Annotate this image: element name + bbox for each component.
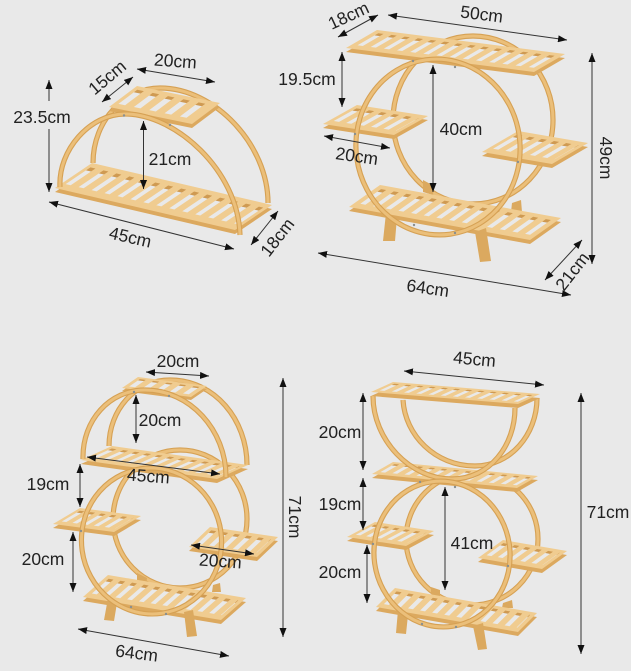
dimension: 20cm upper height: 20cm [139,410,181,430]
dimension: 41cm [445,487,493,590]
screws [372,481,509,628]
bottom shelf [349,185,561,244]
dimension: 20cm [137,50,215,82]
right shelf [478,540,567,573]
dimension: 20cm left shelf: 20cm [334,143,379,169]
dimension: 20cm right shelf [191,545,254,572]
dimension: 45cm: 45cm [107,223,153,252]
top shelf [109,86,220,128]
front legs [104,598,197,637]
figure: arch over ring stand [22,351,305,666]
dimension: 64cm: 64cm [114,641,159,666]
dimension: 19cm: 19cm [27,474,69,494]
dimension: 19.5cm: 19.5cm [278,69,336,89]
dimension: 19cm: 19cm [319,494,361,514]
bottom shelf [55,163,272,234]
right shelf [189,527,278,561]
front legs [383,213,491,262]
bottom shelf [83,575,246,624]
dimension: 64cm [318,253,571,301]
dimension: 19.5cm [278,52,342,107]
dimension: 41cm: 41cm [451,533,493,553]
upper front arch [83,390,226,477]
dimension: 64cm [78,629,229,666]
dimension: 23.5cm [13,80,71,192]
dimension: 21cm: 21cm [551,248,593,294]
lower front ring [72,459,231,623]
dimension: 45cm [87,457,220,487]
left shelf [53,508,141,536]
dimension: 18cm: 18cm [256,214,298,260]
screws [80,391,170,615]
dimension: 20cm lower [319,545,367,603]
dimension: 20cm: 20cm [153,50,197,72]
bottom shelf [376,588,537,636]
figure: bowl over ring stand [319,347,629,654]
lower front ring [365,472,519,636]
dimension: 19cm [27,464,80,507]
dimension: 40cm [433,65,482,192]
right shelf [482,131,588,168]
dimension: 15cm: 15cm [84,56,130,99]
dimension: 20cm left shelf [324,136,390,169]
dimension: 21cm: 21cm [149,149,191,169]
dimension: 20cm right shelf: 20cm [198,550,242,572]
lower back ring [113,450,247,588]
dimension: 20cm top: 20cm [157,351,199,371]
left shelf [347,522,434,550]
dimension: 64cm: 64cm [405,275,450,301]
dimension: 45cm [404,347,544,385]
top shelf [371,382,540,408]
upper back arch [109,380,247,465]
back arch [93,88,268,203]
dimension: 45cm: 45cm [126,465,170,487]
front ring [345,48,531,246]
dimension: 50cm: 50cm [459,2,504,27]
dimension: 71cm: 71cm [285,496,305,538]
dimension: 71cm: 71cm [587,502,629,522]
lower back ring [406,473,538,605]
dimension: 20cm upper [319,393,363,470]
upper back bowl [403,398,537,466]
left shelf [323,105,428,139]
dimension: 49cm: 49cm [596,137,616,179]
dimension: 19cm [319,478,363,530]
dimension: 20cm lower height: 20cm [22,549,64,569]
dimension: 50cm [388,2,567,40]
screws [354,60,519,234]
screws [123,114,171,126]
front arch [60,114,240,235]
figure: single ring stand [278,0,616,301]
dimension: 45cm: 45cm [452,347,497,371]
dimension: 20cm lower height [22,532,73,592]
top shelf [122,377,207,400]
second shelf [372,462,538,492]
second shelf [81,446,248,483]
dimension: 20cm lower: 20cm [319,562,361,582]
dimension: 23.5cm: 23.5cm [13,107,71,127]
figure: two-tier half-arch stand [13,50,298,260]
dimension: 40cm: 40cm [440,119,482,139]
front legs [396,610,487,650]
dimension: 20cm upper height [136,395,181,443]
dimension: 21cm [144,121,191,189]
dimension: 20cm top [146,351,209,376]
back legs [137,573,221,592]
back legs [431,587,513,608]
dimension: 20cm upper: 20cm [319,422,361,442]
dimension: 45cm [49,202,234,252]
back ring [393,36,553,204]
upper front bowl [373,396,515,479]
back legs [423,180,522,212]
top shelf [346,30,565,76]
